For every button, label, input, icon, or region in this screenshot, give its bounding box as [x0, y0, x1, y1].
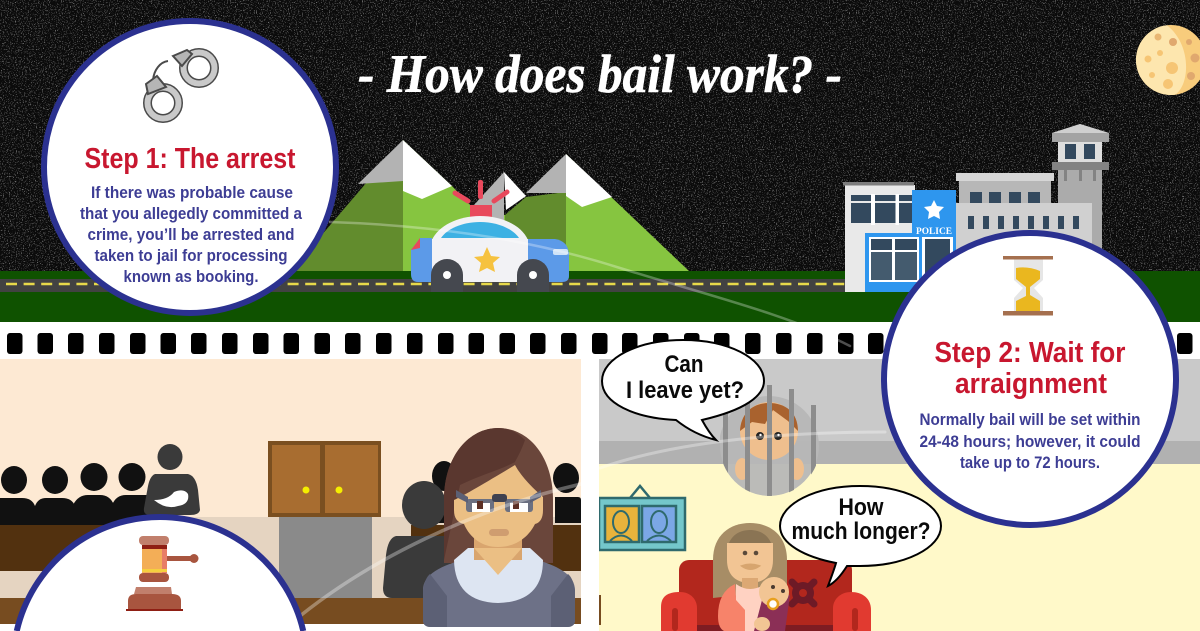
podium [279, 517, 372, 598]
heading: step 1: Step 1: The arrest [84, 143, 296, 175]
panel: holding cell and living room [599, 359, 1200, 631]
prisoner behind bars [719, 385, 819, 500]
front bar [0, 598, 581, 624]
sofa [661, 560, 871, 631]
panel: step 1 circle [44, 21, 336, 313]
speech bubble: Can I leave yet? [602, 340, 764, 440]
step 1 description [80, 183, 302, 286]
icon: police car [411, 180, 569, 292]
gallery silhouettes [0, 461, 581, 525]
step 2 description [920, 410, 1140, 472]
parent with baby silhouette [144, 444, 200, 515]
mountains [290, 140, 690, 272]
speech bubble: Can I leave yet?: Can [664, 351, 704, 378]
police station and prison: POLICE [916, 226, 952, 236]
step 1 description: taken to jail for processing [94, 246, 288, 265]
step 1 description: known as booking. [124, 267, 258, 286]
heading: step 2 [934, 337, 1126, 400]
judge [423, 428, 575, 627]
step 1 description: crime, you’ll be arrested and [88, 225, 294, 244]
speech bubble: How much longer? [780, 486, 941, 586]
speech bubble: How much longer?: much longer? [792, 518, 930, 545]
title: - How does bail work? - [358, 44, 842, 104]
mother and baby [713, 523, 790, 631]
ground and road [0, 271, 1200, 322]
panel: step 2 circle [884, 233, 1176, 525]
speech bubble: Can I leave yet?: I leave yet? [626, 377, 744, 404]
icon: moon [1136, 25, 1200, 95]
film strip [0, 322, 1200, 359]
family picture frame [599, 486, 685, 550]
panel: step 3 circle [17, 517, 303, 631]
step 2 description: 24-48 hours; however, it could [920, 432, 1140, 451]
panel: courtroom [0, 359, 581, 627]
cabinet [268, 441, 381, 517]
heading: step 2: Step 2: Wait for [934, 337, 1126, 369]
step 1 description: that you allegedly committed a [80, 204, 302, 223]
swoosh light streaks [300, 222, 885, 616]
step 2 description: take up to 72 hours. [960, 453, 1100, 472]
speech bubble: How much longer?: How [838, 494, 884, 521]
lawyer silhouette [383, 481, 450, 598]
icon: handcuffs [146, 50, 214, 118]
police station and prison [843, 124, 1109, 292]
step 1 description: If there was probable cause [91, 183, 293, 202]
heading: step 2: arraignment [955, 368, 1107, 400]
step 2 description: Normally bail will be set within [920, 410, 1140, 429]
icon: hourglass [1003, 256, 1053, 316]
night sky background [0, 0, 1200, 272]
icon: gavel [126, 536, 198, 611]
